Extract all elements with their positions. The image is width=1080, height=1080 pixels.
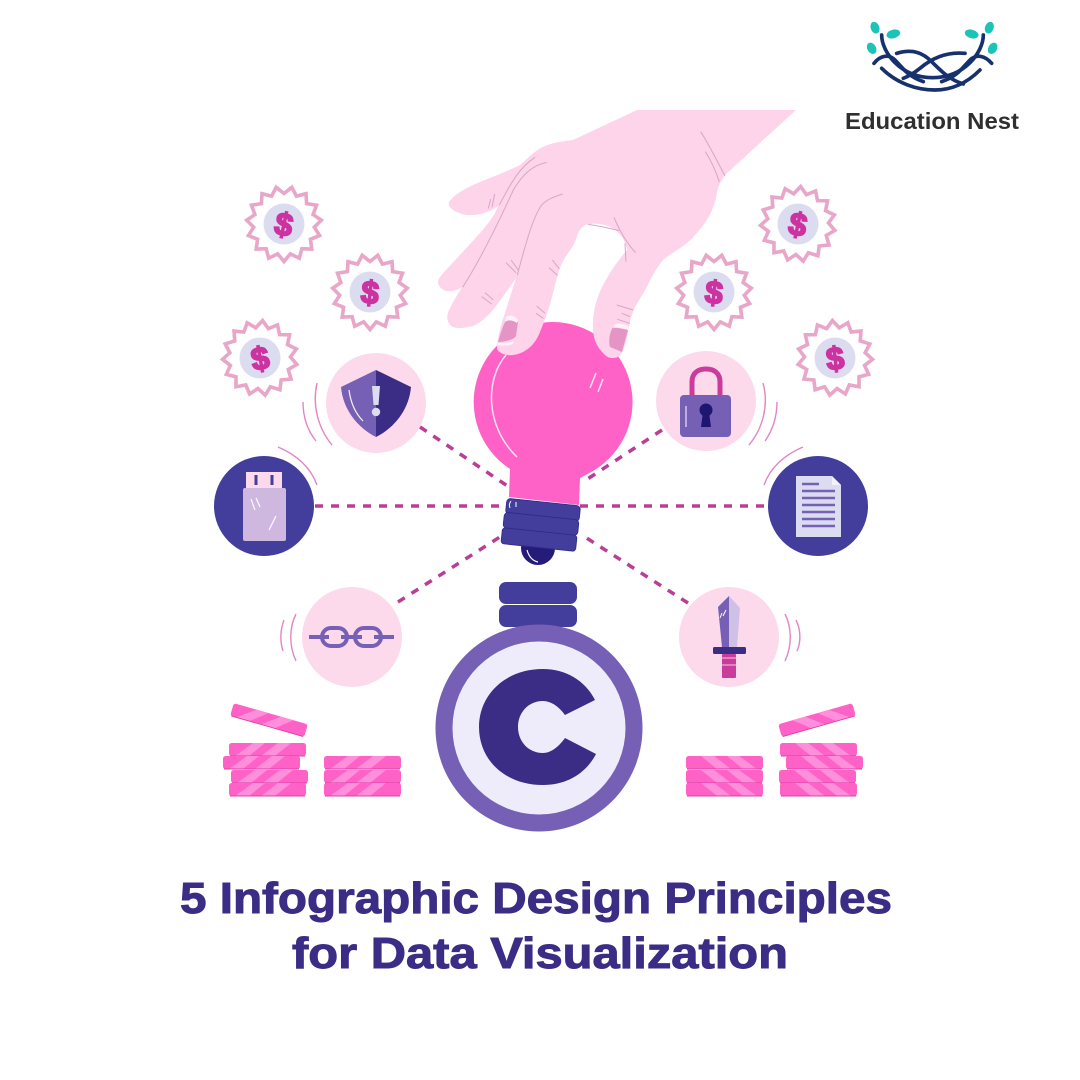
bulb tip: [521, 531, 555, 565]
fingernail: index: [498, 316, 518, 346]
hand holding bulb: [438, 110, 796, 358]
logo: Education Nest: [845, 21, 1019, 134]
coin stacks left: [223, 703, 401, 796]
light bulb: [474, 322, 633, 565]
title: for Data Visualization: [292, 929, 788, 978]
motion arcs: [278, 383, 803, 661]
hand shape: [438, 110, 796, 358]
coin stack left short: [324, 756, 401, 796]
icon: padlock: [656, 351, 756, 451]
dollar badges right: [677, 182, 877, 400]
logo wordmark: Education Nest: [845, 108, 1019, 134]
icon: USB drive: [214, 456, 314, 556]
icon: sword: [679, 587, 779, 687]
dollar badge 6: $: [824, 340, 846, 377]
title: 5 Infographic Design Principles: [180, 874, 892, 923]
title: [180, 874, 892, 978]
dollar badges left: [218, 187, 407, 400]
dollar badge 4: [756, 182, 840, 266]
dollar badge 3: [218, 316, 302, 400]
dollar badge 2: $: [359, 274, 381, 311]
dashed connector lines: [315, 427, 768, 603]
tilted coin right: [778, 703, 856, 737]
dollar badge 5: [677, 255, 751, 330]
dollar badge 1: $: [271, 205, 297, 244]
copyright letter C: [479, 669, 596, 785]
coin stack right short: [686, 756, 763, 796]
dollar badge 6: [793, 316, 877, 400]
tilted coin left: [230, 703, 308, 737]
dollar badge 5: $: [703, 274, 725, 311]
dollar badge 2: [333, 255, 407, 330]
bulb glass: [474, 322, 633, 505]
copyright ring: [436, 624, 642, 832]
coin stack right tall: [779, 743, 863, 796]
icon: chain link: [302, 587, 402, 687]
icon: document: [768, 456, 868, 556]
copyright bulb socket: [436, 582, 642, 832]
socket caps: [499, 582, 577, 627]
fingernail: middle: [609, 324, 629, 352]
bulb screw base: [501, 498, 581, 551]
icon: shield: [326, 353, 426, 453]
dollar badge 3: $: [248, 339, 272, 378]
coin stack left tall: [223, 743, 308, 796]
dollar badge 1: [247, 187, 321, 262]
coin stacks right: [686, 703, 863, 796]
dollar badge 4: $: [785, 205, 811, 244]
bulb highlights: [491, 355, 603, 457]
hand creases: [463, 132, 725, 323]
logo mark: nest with leaves: [865, 21, 999, 90]
